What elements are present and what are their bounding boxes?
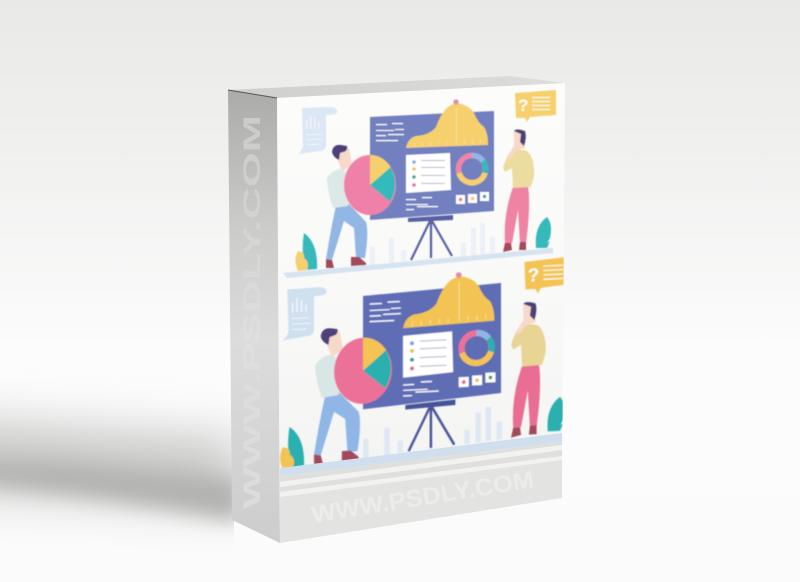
tripod — [408, 215, 453, 260]
left man carrying pie — [326, 145, 396, 268]
white list card — [406, 153, 451, 193]
lower pie chart — [334, 336, 392, 405]
right man thinking — [503, 130, 534, 252]
product box — [228, 76, 570, 543]
yellow ruler hill — [406, 103, 488, 148]
lower left plant — [280, 426, 304, 469]
box side top edge — [228, 90, 277, 98]
presentation board — [370, 99, 494, 260]
lower right man thinking — [511, 301, 546, 438]
lower left man carrying pie — [314, 325, 392, 464]
box bottom band — [280, 433, 562, 543]
lower right plant — [547, 397, 564, 431]
pie chart — [344, 155, 396, 215]
box front face — [277, 83, 565, 543]
box top face — [228, 76, 565, 98]
question speech bubble — [515, 90, 556, 122]
lower donut chart — [462, 332, 492, 364]
box front watermark: WWW.PSDLY.COM — [310, 466, 536, 529]
lower paper scroll icon — [283, 287, 326, 340]
upper illustration — [283, 90, 556, 278]
question speech bubble: ? — [518, 96, 528, 115]
box side face — [228, 90, 280, 543]
board header lines — [376, 123, 438, 210]
hill pin — [453, 99, 459, 105]
lower tripod — [405, 399, 455, 451]
lower illustration — [280, 257, 570, 469]
floor bars — [370, 223, 495, 265]
lower question speech bubble — [524, 256, 564, 294]
lower question speech bubble: ? — [528, 264, 539, 286]
donut chart — [458, 155, 486, 183]
box side watermark: WWW.PSDLY.COM — [239, 115, 266, 509]
paper scroll icon — [298, 107, 337, 154]
left plant — [296, 233, 317, 271]
lower white list card — [403, 331, 453, 378]
small squares — [456, 192, 489, 204]
lower floor bars — [363, 406, 502, 459]
box shadow on floor — [0, 420, 240, 522]
lower hill pin — [456, 272, 462, 278]
lower board lines — [370, 299, 439, 398]
lower presentation board — [363, 270, 501, 453]
floor — [283, 248, 553, 278]
right plant — [536, 217, 551, 248]
lower yellow ruler hill — [403, 275, 494, 328]
lower small squares — [459, 372, 495, 387]
